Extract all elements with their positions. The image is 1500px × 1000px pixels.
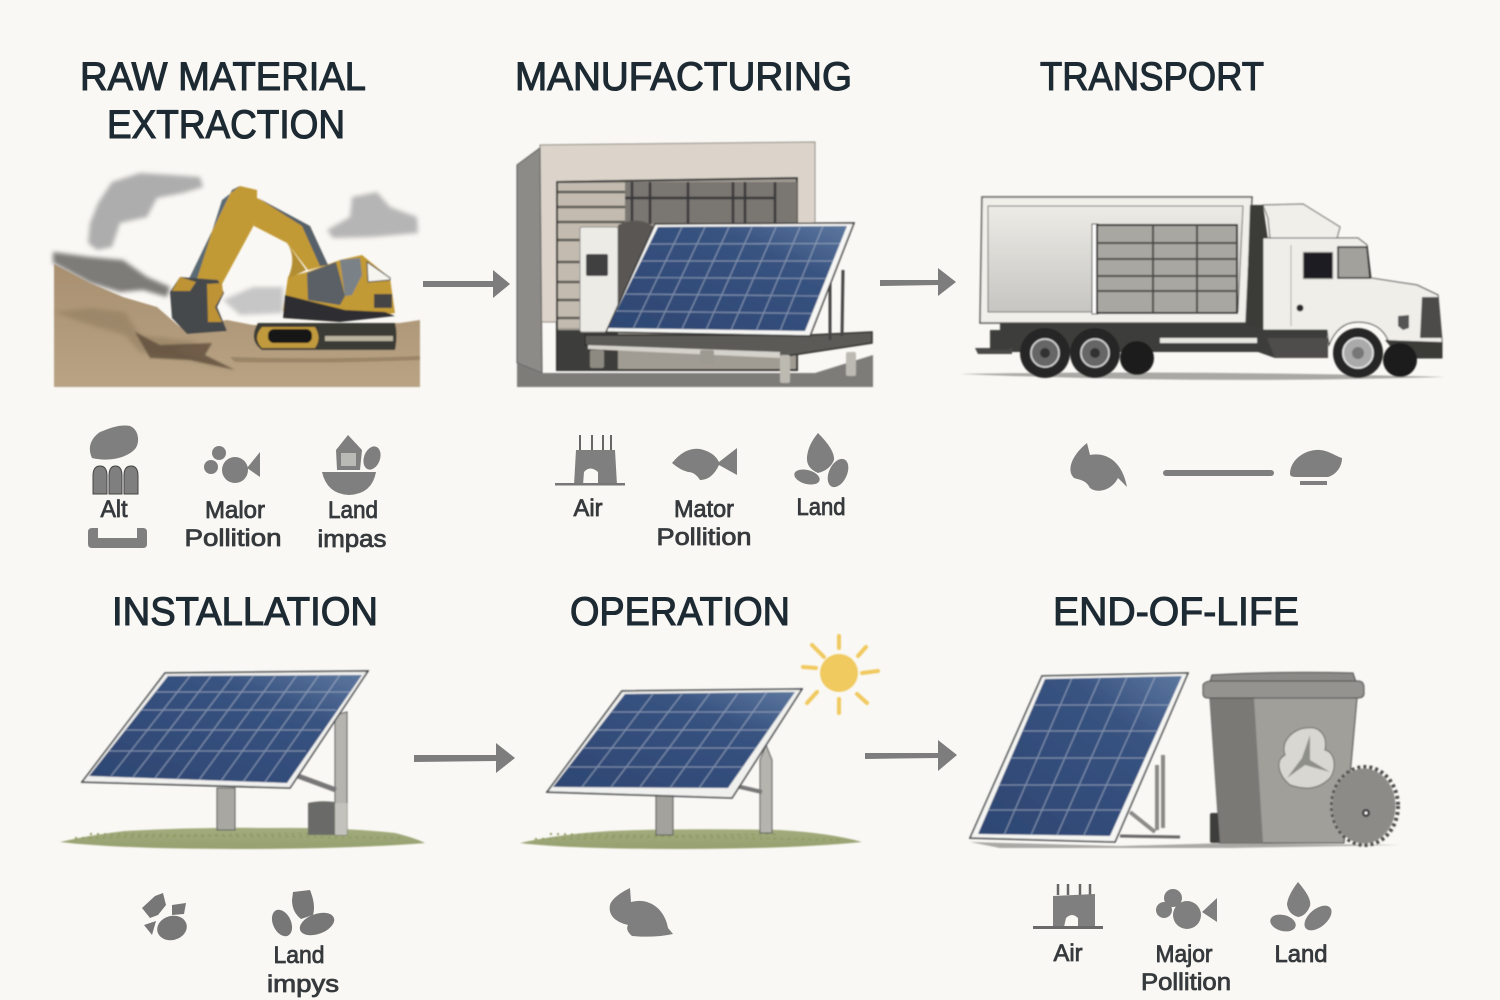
label: land impact [267, 942, 339, 998]
label: major pollution [656, 496, 752, 551]
heading: raw material extraction: RAW MATERIAL [80, 55, 366, 99]
impact icons: end-of-life [1033, 882, 1336, 996]
heading: raw material extraction: EXTRACTION [107, 103, 345, 147]
icon: water pollution fish [204, 446, 260, 483]
label: air: Air [574, 495, 602, 522]
illustration: factory with solar panel [517, 142, 873, 387]
icon: road line [1163, 470, 1274, 476]
label: major pollution: Pollition [656, 524, 752, 551]
icon: air, factory [555, 435, 625, 486]
icon: leaves [268, 890, 337, 940]
label: major pollution: Pollition [1141, 969, 1231, 996]
solar panel [547, 689, 802, 798]
icon: smoke puff [1070, 443, 1127, 491]
illustration: operating solar panel under sun [520, 636, 878, 849]
label: air: Air [1054, 940, 1082, 967]
impact icons: installation [142, 890, 339, 998]
impact icons: manufacturing [555, 433, 852, 551]
icon: rocks [142, 893, 190, 943]
impact icons: transport [1070, 443, 1342, 491]
heading: manufacturing: MANUFACTURING [515, 55, 852, 99]
heading: transport: TRANSPORT [1040, 55, 1264, 99]
label: major pollution: Major [1156, 941, 1213, 968]
icon: fish [1156, 889, 1217, 929]
heading: raw material extraction [80, 55, 366, 147]
label: land: Land [1274, 941, 1328, 968]
label: land impact: Land [274, 942, 324, 969]
heading: operation: OPERATION [570, 590, 790, 634]
label: land impact: impys [267, 971, 339, 998]
solar panel [970, 673, 1188, 842]
label: land impact [318, 497, 386, 553]
arrow 3 [414, 743, 515, 773]
solar panel [82, 671, 368, 788]
chassis [1000, 323, 1327, 358]
gear [1332, 767, 1398, 845]
illustration: excavator at mining site [53, 173, 420, 387]
impact icons: raw material extraction [88, 425, 386, 553]
icon: leaves [793, 433, 852, 490]
heading: end-of-life: END-OF-LIFE [1053, 590, 1299, 634]
label: land impact: Land [328, 497, 378, 524]
label: air: Alt [100, 496, 128, 523]
arrow 1 [423, 270, 510, 298]
cab [1246, 205, 1268, 328]
icon: fish [672, 448, 737, 480]
label: major pollution: Mator [674, 496, 734, 523]
label: major pollution [1141, 941, 1231, 996]
arrow 4 [865, 740, 957, 771]
bucket [170, 277, 227, 334]
label: land: Land [796, 494, 846, 521]
tracks [254, 323, 396, 350]
label: major pollution: Malor [205, 497, 265, 524]
illustration: end-of-life panel with bin and gear [970, 672, 1400, 848]
icon: land [322, 435, 384, 495]
body [283, 255, 395, 322]
solar panel [606, 223, 854, 336]
impact icon: operation [610, 888, 673, 937]
recycling bin [1203, 672, 1364, 843]
icon: sun [803, 636, 878, 713]
icon: air, factory [1033, 884, 1103, 929]
icon: dome [1290, 450, 1342, 485]
illustration: installed solar panel on grass [60, 671, 425, 849]
label: major pollution: Pollition [184, 525, 282, 552]
label: land impact: impas [318, 526, 386, 553]
arrow 2 [880, 268, 956, 296]
icon: leaves [1268, 882, 1336, 935]
boom and arm [187, 186, 257, 284]
illustration: delivery truck [960, 197, 1445, 380]
icon: air, cloud over factory [88, 425, 147, 548]
heading: installation: INSTALLATION [112, 590, 378, 634]
label: major pollution [184, 497, 282, 552]
wheels [1120, 341, 1154, 375]
